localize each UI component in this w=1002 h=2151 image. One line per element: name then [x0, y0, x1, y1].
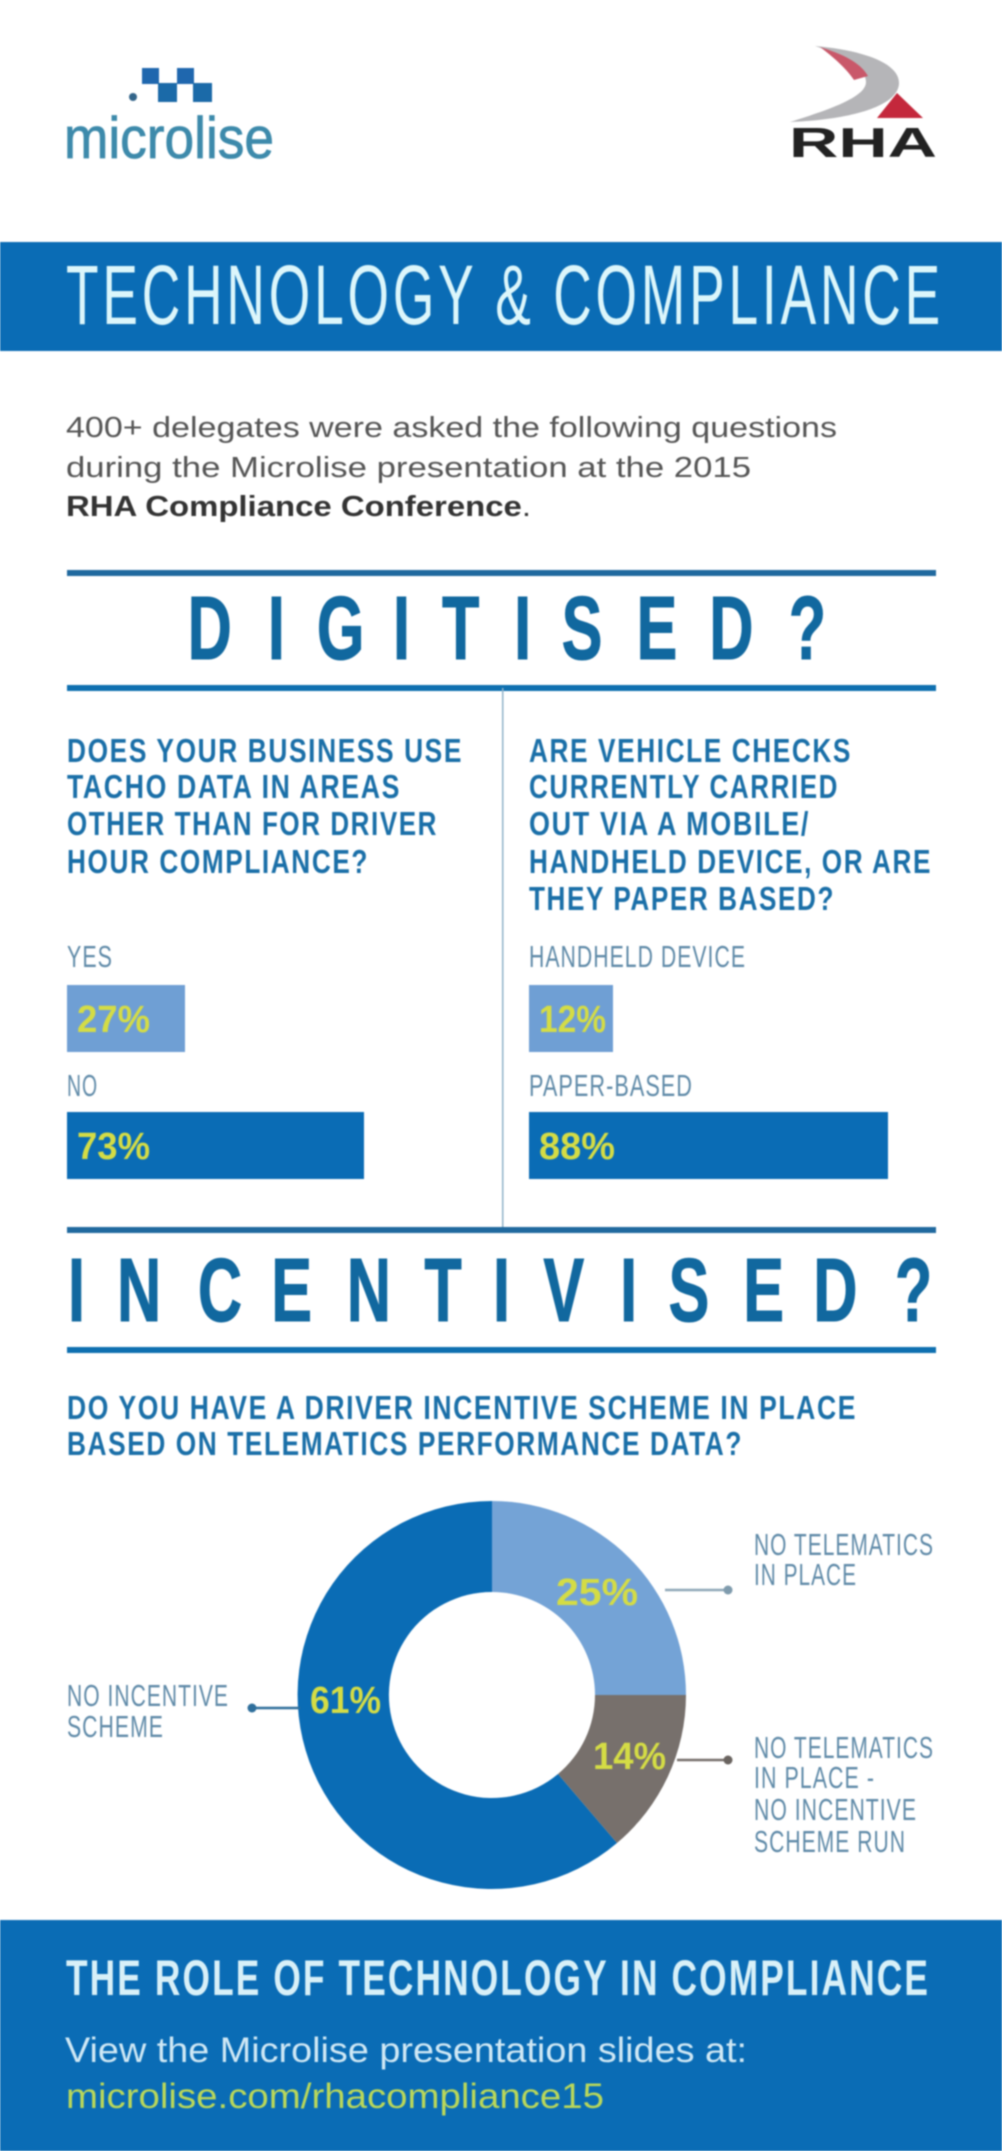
bar: handheld 12%: HANDHELD DEVICE [529, 939, 746, 974]
heading: digitised: DIGITISED? [188, 578, 826, 679]
intro text: RHA Compliance Conference . [66, 491, 531, 523]
callout: no telematics, no incentive scheme run [677, 1730, 934, 1859]
bar: yes 27%: 27% [77, 999, 150, 1041]
donut chart [298, 1501, 686, 1889]
footer panel [0, 1920, 1002, 2151]
intro text [66, 412, 837, 523]
callout: no incentive scheme: SCHEME [67, 1709, 164, 1744]
donut chart: 25% [556, 1572, 638, 1614]
logo: microlise [64, 68, 274, 171]
question text: OTHER THAN FOR DRIVER [67, 805, 438, 842]
callout: no telematics, no incentive scheme run: IN PLACE - [754, 1760, 875, 1795]
bar: paper-based 88%: PAPER-BASED [529, 1068, 693, 1103]
footer link: microlise.com/rhacompliance15 [66, 2077, 604, 2116]
question: driver incentive scheme [67, 1389, 857, 1462]
question: driver incentive scheme: BASED ON TELEMATICS PERFORMANCE DATA? [67, 1425, 743, 1462]
donut chart: 61% [310, 1680, 381, 1722]
footer text: View the Microlise presentation slides at: [65, 2031, 747, 2070]
intro text: 400+ delegates were asked the following questions [66, 412, 837, 444]
donut chart: 14% [593, 1736, 666, 1778]
bar: paper-based 88%: 88% [539, 1126, 615, 1168]
logo: RHA [789, 46, 937, 166]
bar: yes 27%: YES [67, 939, 113, 974]
logo: microlise: microlise [64, 106, 274, 171]
panel: vehicle checks question [529, 732, 932, 1179]
callout: no incentive scheme [67, 1678, 300, 1744]
question text: THEY PAPER BASED? [529, 880, 835, 917]
bar: handheld 12% [529, 939, 746, 1052]
bar: no 73%: NO [67, 1068, 98, 1103]
question text: HOUR COMPLIANCE? [67, 843, 369, 880]
question text [529, 732, 932, 917]
callout: no telematics, no incentive scheme run: NO INCENTIVE [754, 1792, 917, 1827]
callout: no telematics in place: IN PLACE [754, 1557, 857, 1592]
question text: DOES YOUR BUSINESS USE [67, 732, 463, 769]
callout: no incentive scheme: NO INCENTIVE [67, 1678, 229, 1713]
question text: TACHO DATA IN AREAS [67, 768, 401, 805]
bar: yes 27% [67, 939, 185, 1052]
bar: handheld 12%: 12% [539, 999, 606, 1041]
intro text: during the Microlise presentation at the 2015 [66, 452, 751, 484]
callout: no telematics in place [665, 1527, 934, 1594]
heading: incentivised: INCENTIVISED? [68, 1240, 932, 1341]
question text: CURRENTLY CARRIED [529, 768, 839, 805]
bar: paper-based 88% [529, 1068, 888, 1179]
callout: no telematics, no incentive scheme run: SCHEME RUN [754, 1824, 906, 1859]
panel: tacho data question [67, 732, 463, 1179]
logo: RHA: RHA [789, 119, 937, 166]
question text: OUT VIA A MOBILE/ [529, 805, 810, 842]
bar: no 73%: 73% [77, 1126, 150, 1168]
question text [67, 732, 463, 880]
question text: ARE VEHICLE CHECKS [529, 732, 852, 769]
bar: no 73% [67, 1068, 364, 1179]
